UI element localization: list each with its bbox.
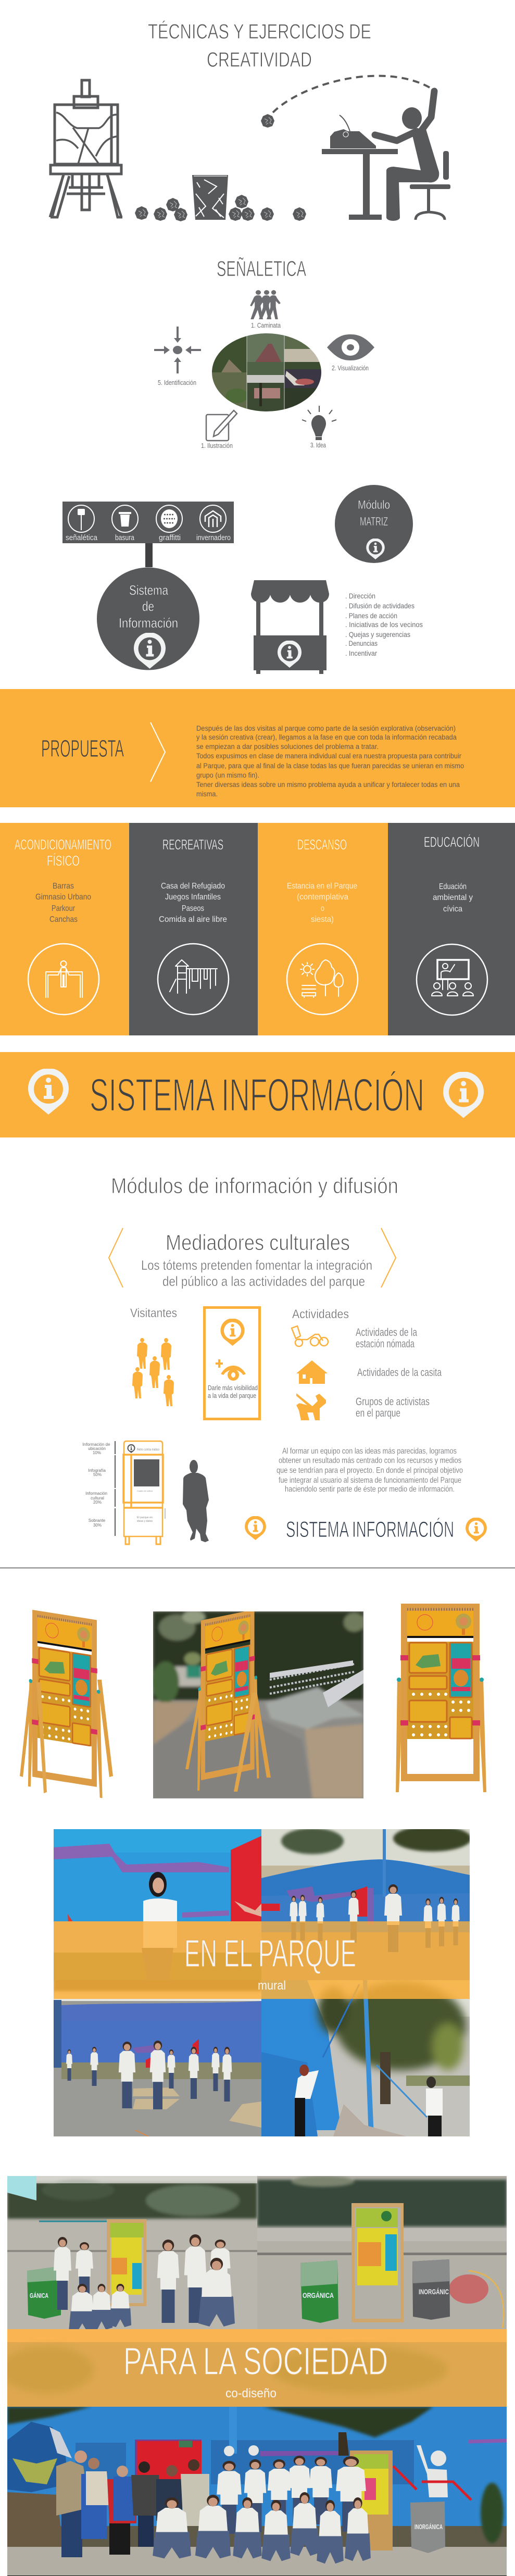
dimension labels: Información de <box>83 1442 110 1447</box>
totem card <box>204 1307 259 1419</box>
badge: módulo matriz <box>335 485 413 563</box>
photo grid: mural <box>54 1825 471 2136</box>
module labels: basura <box>115 533 135 542</box>
proposal text: grupo (un mismo fin). <box>196 771 259 779</box>
dimension labels: cultural <box>91 1496 104 1500</box>
icon: convergent arrows with caption: 5. Identificación <box>158 379 196 386</box>
visitors: Visitantes <box>130 1306 177 1320</box>
dimension labels <box>83 1442 110 1528</box>
list: stall functions <box>345 592 423 657</box>
activities: en el parque <box>356 1407 400 1419</box>
painted boy on the wall <box>417 2445 448 2497</box>
icon: light bulb with caption <box>302 406 336 449</box>
band subtitle: mural <box>258 1979 286 1993</box>
callout: mediadores culturales: Los tótems pretenden fomentar la integración <box>141 1257 372 1273</box>
panel: acondicionamiento físico: Canchas <box>49 915 78 924</box>
arrow: chevron <box>150 722 165 782</box>
module labels: señalética <box>66 533 98 542</box>
panel: educación: Eduación <box>439 882 467 891</box>
list: stall functions: . Iniciativas de los vecinos <box>345 620 423 629</box>
panel: recreativas: RECREATIVAS <box>162 836 223 853</box>
text block: conclusion: que se tendrían para el proyecto. En donde el principal objetivo <box>277 1466 463 1475</box>
photo: group with bin and stand: GÁNICA <box>30 2292 48 2299</box>
panel: descanso: Estancia en el Parque <box>287 882 357 891</box>
band subtitle: co-diseño <box>225 2386 277 2400</box>
icon: graffiti <box>161 509 178 528</box>
icon: plus eye <box>216 1359 246 1381</box>
activities: estación nómada <box>356 1338 414 1350</box>
photo: stand in the park <box>152 1608 365 1798</box>
totem card: Darle más visibilidad <box>208 1384 258 1392</box>
title: TÉCNICAS Y EJERCICIOS DE <box>148 20 371 43</box>
dimension labels: 20% <box>93 1500 102 1505</box>
title: CREATIVIDAD <box>207 48 312 71</box>
module labels: graffitti <box>159 533 181 542</box>
photo: stand between bins <box>257 2176 507 2329</box>
badge: sistema de información <box>97 568 199 670</box>
list: stall functions: . Denuncias <box>345 639 378 647</box>
activities: Actividades <box>292 1307 349 1321</box>
callout: mediadores culturales: Mediadores culturales <box>166 1230 350 1255</box>
proposal text: y la sesión creativa (crear), llegamos a la fase en que con toda la información recabada <box>196 733 457 741</box>
icon: signpost <box>78 509 85 530</box>
photo: whole group at mural: INORGÁNICA <box>414 2523 443 2531</box>
list: stall functions: . Quejas y sugerencias <box>345 630 410 639</box>
photo grid: co-design <box>0 2176 507 2576</box>
dimension labels: 10% <box>93 1450 101 1455</box>
panel: acondicionamiento físico <box>0 823 129 1035</box>
totem blueprint: El parque en <box>137 1516 153 1519</box>
totem blueprint: Cuadro de cultura <box>137 1490 153 1492</box>
badge: módulo matriz: Módulo <box>358 498 390 511</box>
badge: sistema de información: de <box>142 598 154 614</box>
product render: front stand <box>396 1604 486 1792</box>
title <box>148 20 371 71</box>
panel: recreativas: Casa del Refugiado <box>161 882 225 891</box>
dimension labels: Infografía <box>88 1468 106 1473</box>
icon: parallel bars <box>46 961 82 997</box>
band title: PARA LA SOCIEDAD <box>123 2340 388 2383</box>
totem blueprint <box>83 1441 165 1544</box>
photo: team at blue wall <box>261 1825 471 1980</box>
badge: sistema de información: Sistema <box>129 582 168 598</box>
icon: small info pin <box>127 1444 135 1453</box>
panel: recreativas: Paseos <box>182 904 204 913</box>
orange band <box>0 2329 507 2407</box>
icon: classroom <box>432 960 473 996</box>
panel: descanso <box>258 823 388 1035</box>
icon: cargo bike <box>292 1326 328 1346</box>
panel: recreativas: Comida al aire libre <box>159 915 227 924</box>
panel: propuesta <box>0 689 515 807</box>
product render: left stand <box>20 1609 113 1798</box>
panel: recreativas: Juegos Infantiles <box>165 893 221 902</box>
proposal text <box>196 724 464 798</box>
proposal text: Tener diversas ideas sobre un mismo problema ayuda a unificar y fortalecer todas en una <box>196 781 460 789</box>
photo: whole group at mural <box>7 2407 507 2575</box>
photo: team on concrete court <box>54 1977 261 2136</box>
photo: stand between bins: ORGÁNICA <box>303 2291 334 2299</box>
panel: descanso: o <box>321 904 324 913</box>
band title: EN EL PARQUE <box>184 1932 356 1975</box>
panel: descanso: DESCANSO <box>297 836 347 853</box>
text block: conclusion: obtener un resultado más centrado con los recursos y medios <box>279 1456 461 1465</box>
dimension labels: ubicación <box>88 1446 106 1451</box>
panel: acondicionamiento físico: FÍSICO <box>47 853 80 869</box>
icon: person at typewriter <box>322 91 450 221</box>
visitors <box>130 1306 177 1406</box>
icon: tree, sun and bench <box>300 960 343 997</box>
totem blueprint: Retro contra mático <box>137 1448 160 1452</box>
proposal text: al Parque, para que al final de la clase todas las que fueran parecidas se unieran en mismo <box>196 762 464 770</box>
list: stall functions: . Difusión de actividades <box>345 602 414 610</box>
totem blueprint: ideas y datos <box>137 1520 153 1523</box>
photo: group with bin and stand <box>7 2176 257 2329</box>
text block: conclusion: fue integrar al usuario al sistema de funcionamiento del Parque <box>279 1476 461 1485</box>
panel: recreativas <box>129 823 258 1035</box>
dimension bars <box>115 1441 116 1536</box>
badge: módulo matriz: MATRIZ <box>360 515 388 528</box>
heading: módulos de información y difusión: Módulos de información y difusión <box>111 1173 398 1198</box>
proposal text: Todos expusimos en clase de manera individual cual era nuestra propuesta para contribuir <box>196 752 461 760</box>
dimension labels: Información <box>85 1491 107 1496</box>
panel: acondicionamiento físico: Barras <box>53 882 74 891</box>
photo: stand between bins: INORGÁNIC <box>419 2287 449 2296</box>
icon: trash can <box>119 512 131 527</box>
activities <box>292 1307 442 1420</box>
proposal text: se empiezan a dar posibles soluciones del problema a tratar. <box>196 743 379 751</box>
icon: notebook and pencil with caption <box>201 410 237 449</box>
heading: señalética: SEÑALETICA <box>217 256 306 281</box>
module labels <box>66 533 231 542</box>
text block: conclusion: Al formar un equipo con las ideas más parecidas, logramos <box>282 1447 457 1456</box>
icon: dog <box>296 1393 326 1420</box>
panel: acondicionamiento físico: Gimnasio Urbano <box>35 893 91 902</box>
photo: painting with rollers <box>261 1980 470 2136</box>
icon: house <box>296 1360 328 1384</box>
icon: walkers with caption: 1. Caminata <box>251 321 281 329</box>
callout: mediadores culturales <box>109 1228 396 1289</box>
dimension labels: 30% <box>93 1523 102 1528</box>
panel: educación: cívica <box>443 905 462 914</box>
sign pole <box>145 543 153 567</box>
panel: educación: EDUCACIÓN <box>424 834 480 850</box>
icon: notebook and pencil with caption: 1. Ilustración <box>201 442 233 449</box>
icon: thrown paper ball with dashed arc <box>261 76 433 128</box>
activities: Actividades de la casita <box>357 1367 442 1379</box>
panel: educación: ambiental y <box>433 893 473 902</box>
panel: educación <box>388 823 515 1035</box>
icon: walkers with caption <box>250 290 281 329</box>
text block: conclusion <box>277 1447 463 1494</box>
icon: playground <box>170 960 217 993</box>
human silhouette for scale <box>183 1460 209 1542</box>
icon: information stall <box>251 580 329 674</box>
icon: convergent arrows with caption <box>154 327 201 386</box>
orange band <box>54 1921 470 1980</box>
sign: four modules <box>62 502 234 543</box>
panel: acondicionamiento físico: Parkour <box>52 904 76 913</box>
panel: descanso: siesta) <box>311 915 334 924</box>
dimension labels: 50% <box>93 1472 102 1477</box>
panel: propuesta: PROPUESTA <box>41 735 124 762</box>
photo: woman at mural <box>54 1829 261 1980</box>
icon: waste basket with paper balls <box>135 175 306 221</box>
list: stall functions: . Dirección <box>345 592 375 600</box>
text block: conclusion: haciendolo sentir parte de éste por medio de información. <box>285 1485 455 1494</box>
activities: Actividades de la <box>356 1327 417 1339</box>
proposal text: Después de las dos visitas al parque como parte de la sesión explorativa (observación) <box>196 724 456 732</box>
panel: descanso: (contemplativa <box>297 893 348 902</box>
icon: greenhouse <box>205 511 221 527</box>
callout: mediadores culturales: del público a las actividades del parque <box>162 1273 365 1289</box>
panel: acondicionamiento físico: ACONDICIONAMIENTO <box>15 836 111 853</box>
photo collage circle <box>212 333 321 411</box>
list: stall functions: . Planes de acción <box>345 611 397 620</box>
icon: eye with caption: 2. Visualización <box>332 364 369 372</box>
activities: Grupos de activistas <box>356 1396 430 1408</box>
dimension labels: Sobrante <box>89 1518 106 1523</box>
totem card: a la vida del parque <box>208 1392 256 1399</box>
proposal text: misma. <box>196 790 218 798</box>
banner: sistema información <box>0 1052 515 1137</box>
list: stall functions: . Incentivar <box>345 649 377 657</box>
module labels: invernadero <box>196 533 231 542</box>
icon: eye with caption <box>327 334 374 372</box>
icon: easel <box>50 80 122 217</box>
badge: sistema de información: Información <box>119 615 178 631</box>
icon: light bulb with caption: 3. Idea <box>310 441 326 449</box>
